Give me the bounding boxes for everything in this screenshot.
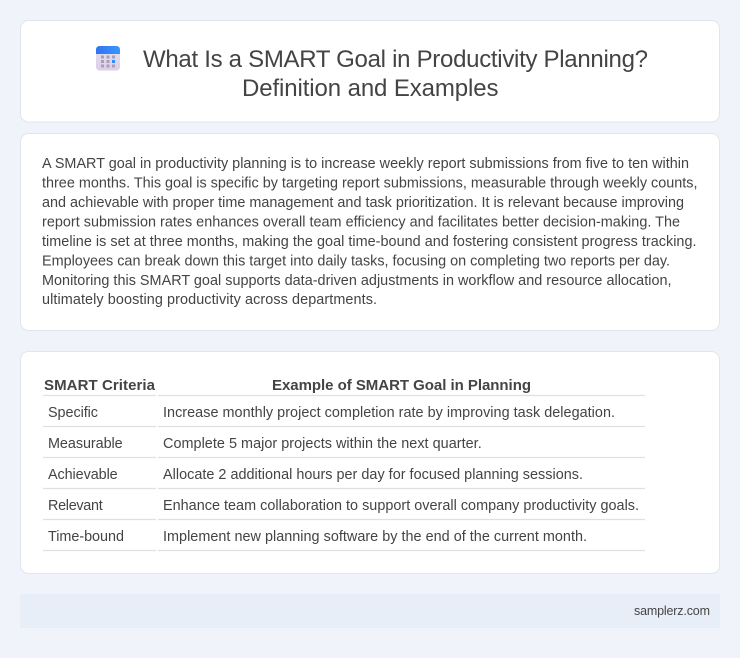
table row: Specific [43, 405, 645, 426]
table row: Measurable [43, 436, 645, 458]
table header [43, 377, 645, 396]
text block: SMART goal explanation: report submission rates enhances overall team efficiency and facilitates better decision-making. The [42, 214, 680, 230]
table row: Specific: Increase monthly project completion rate by improving task delegation. [163, 405, 615, 421]
text block: SMART goal explanation: ultimately boosting productivity across departments. [42, 292, 377, 308]
table row: Time-bound: Implement new planning software by the end of the current month. [163, 529, 587, 545]
title: Definition and Examples [242, 75, 498, 102]
table row: Time-bound: Time-bound [48, 529, 124, 545]
title [143, 46, 648, 102]
text block: SMART goal explanation: Employees can break down this target into daily tasks, focusing on completing two reports per day. [42, 254, 670, 270]
table row: Time-bound [43, 529, 645, 550]
text block: SMART goal explanation: three months. This goal is specific by targeting report submissions, measurable through weekly counts, [42, 176, 698, 192]
table row: Achievable: Achievable [48, 467, 118, 483]
table row: Relevant: Enhance team collaboration to support overall company productivity goals. [163, 498, 639, 514]
text block: SMART goal explanation: timeline is set at three months, making the goal time-bound and fostering consistent progress tracking. [42, 234, 696, 250]
table header: Example of SMART Goal in Planning [272, 377, 531, 394]
footer: samplerz.com [634, 604, 710, 618]
table row: Achievable: Allocate 2 additional hours per day for focused planning sessions. [163, 467, 583, 483]
text block: SMART goal explanation: A SMART goal in productivity planning is to increase weekly report submissions from five to ten within [42, 156, 689, 172]
table row: Specific: Specific [48, 405, 98, 421]
title: What Is a SMART Goal in Productivity Planning? [143, 46, 648, 73]
table row: Measurable: Measurable [48, 436, 123, 452]
table row: Relevant: Relevant [48, 498, 103, 514]
table row: Measurable: Complete 5 major projects within the next quarter. [163, 436, 482, 452]
text block: SMART goal explanation [42, 156, 698, 308]
icon: calendar [96, 46, 120, 70]
panel: SMART criteria table [20, 352, 720, 574]
table row: Achievable [43, 467, 645, 488]
panel: description [20, 134, 720, 330]
text block: SMART goal explanation: and achievable with proper time management and task prioritization. It is relevant because improving [42, 195, 684, 211]
panel: title card [20, 20, 720, 122]
text block: SMART goal explanation: Monitoring this SMART goal supports data-driven adjustments in workflow and resource allocation, [42, 273, 672, 289]
table row: Relevant [43, 498, 645, 520]
table header: SMART Criteria [44, 377, 156, 394]
footer [20, 594, 720, 628]
